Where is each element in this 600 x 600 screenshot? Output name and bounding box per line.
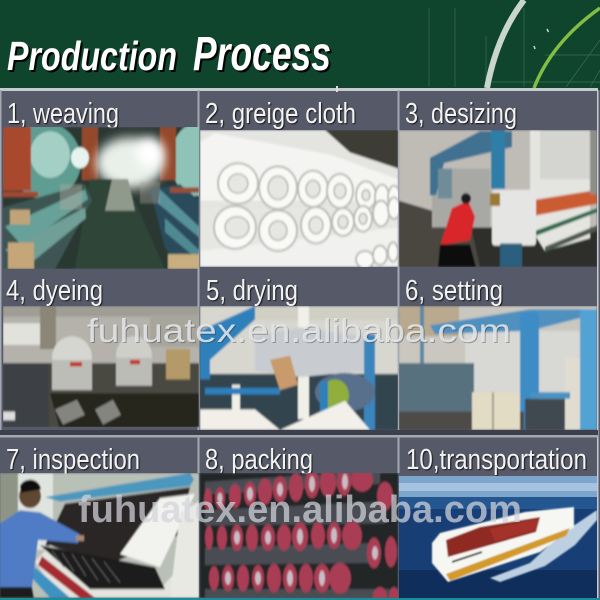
photo: inspection worker bbox=[0, 473, 199, 598]
label: packing: 8, packing bbox=[205, 444, 313, 476]
step labels: 8, packing bbox=[206, 445, 314, 477]
label: dyeing: 4, dyeing bbox=[6, 275, 103, 307]
title: Process bbox=[195, 30, 333, 83]
label: greige cloth: 2, greige cloth bbox=[205, 98, 356, 130]
title: Production bbox=[9, 35, 179, 81]
step labels: 2, greige cloth bbox=[206, 99, 357, 131]
step labels: 7, inspection bbox=[7, 445, 141, 477]
label: desizing: 3, desizing bbox=[405, 98, 517, 130]
label: inspection: 7, inspection bbox=[6, 444, 140, 476]
step labels: 6, setting bbox=[406, 276, 504, 308]
photo: packed fabric rolls bbox=[200, 467, 399, 600]
photo: dyeing machines bbox=[3, 306, 199, 430]
photo: drying machine bbox=[200, 306, 398, 430]
label: weaving: 1, weaving bbox=[7, 98, 119, 130]
step labels: 3, desizing bbox=[406, 99, 518, 131]
photo: weaving hall bbox=[3, 127, 199, 269]
photo: desizing machine bbox=[399, 130, 597, 267]
step labels: 1, weaving bbox=[8, 99, 120, 131]
title bbox=[7, 28, 333, 83]
green header background bbox=[0, 0, 600, 90]
step labels: 4, dyeing bbox=[7, 276, 104, 308]
title: Production bbox=[7, 33, 177, 79]
label: setting: 6, setting bbox=[405, 275, 503, 307]
photo: cargo ship at sea bbox=[399, 476, 597, 598]
label: drying: 5, drying bbox=[206, 275, 298, 307]
photo: greige cloth rolls bbox=[200, 130, 400, 268]
photo: setting machine bbox=[399, 306, 597, 430]
watermark: lower: fuhuatex.en.alibaba.com bbox=[78, 489, 522, 531]
watermark: upper: fuhuatex.en.alibaba.com bbox=[88, 313, 512, 350]
title: Process bbox=[193, 28, 331, 81]
step labels bbox=[7, 99, 588, 477]
step labels: 5, drying bbox=[207, 276, 299, 308]
watermark: upper: fuhuatex.en.alibaba.com bbox=[87, 312, 511, 349]
